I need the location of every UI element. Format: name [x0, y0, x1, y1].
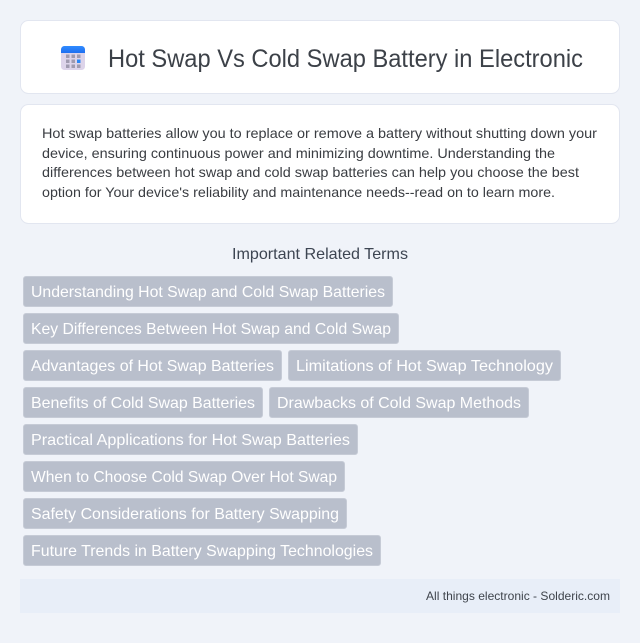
tag: when to choose: When to Choose Cold Swap Over Hot Swap [31, 469, 337, 486]
heading: important related terms: Important Related Terms [232, 246, 408, 263]
list: related term tags [24, 276, 560, 566]
icon: calendar [61, 46, 85, 70]
tag: understanding: Understanding Hot Swap and Cold Swap Batteries [31, 284, 385, 301]
tag: limitations: Limitations of Hot Swap Technology [296, 358, 553, 375]
tag: advantages: Advantages of Hot Swap Batteries [31, 358, 274, 375]
tag: benefits: Benefits of Cold Swap Batteries [31, 395, 255, 412]
text block: introduction paragraph [42, 125, 597, 200]
text block: introduction paragraph: option for Your device's reliability and maintenance needs--read on to learn more. [42, 184, 555, 200]
tag: practical applications [24, 424, 358, 454]
tag: key differences: Key Differences Between Hot Swap and Cold Swap [31, 321, 391, 338]
tag: future trends: Future Trends in Battery Swapping Technologies [31, 543, 373, 560]
footer: All things electronic - Solderic.com [426, 589, 610, 603]
tag: key differences [24, 314, 398, 344]
tag: safety: Safety Considerations for Battery Swapping [31, 506, 339, 523]
tag: advantages [24, 350, 282, 380]
text block: introduction paragraph: differences between hot swap and cold swap batteries can help you choose the best [42, 164, 579, 180]
text block: introduction paragraph: device, ensuring continuous power and minimizing downtime. Understanding the [42, 145, 555, 161]
tag: benefits [24, 388, 262, 418]
panel: introduction [20, 104, 620, 224]
tag: when to choose [24, 462, 344, 492]
tag: drawbacks [270, 388, 528, 418]
tag: practical applications: Practical Applications for Hot Swap Batteries [31, 432, 350, 449]
panel: title header [20, 20, 620, 94]
tag: drawbacks: Drawbacks of Cold Swap Methods [277, 395, 521, 412]
tag: future trends [24, 536, 380, 566]
tag: limitations [288, 350, 560, 380]
footer [20, 579, 620, 613]
text block: introduction paragraph: Hot swap batteries allow you to replace or remove a battery without shutting down your [42, 125, 597, 141]
tag: safety [24, 498, 346, 528]
tag: understanding [24, 276, 392, 306]
title: Hot Swap Vs Cold Swap Battery in Electronic [108, 45, 583, 73]
